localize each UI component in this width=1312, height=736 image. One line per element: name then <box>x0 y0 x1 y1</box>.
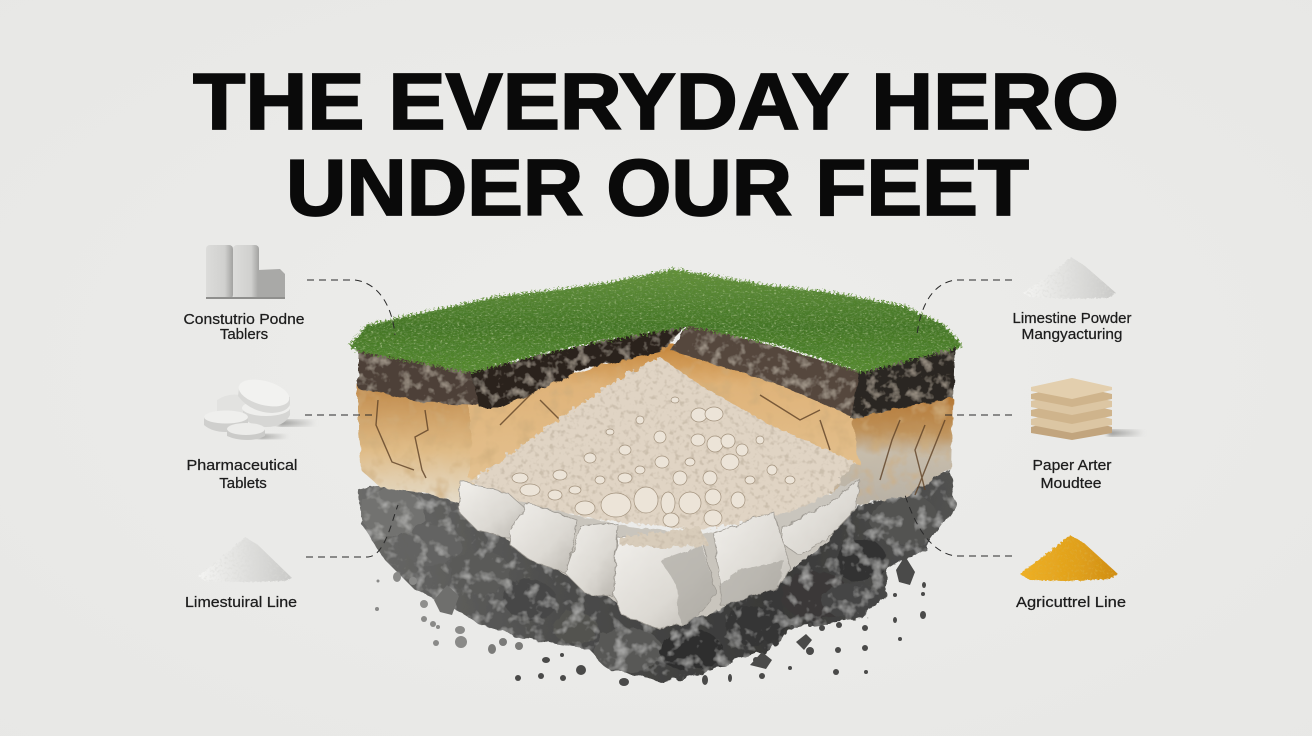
label: agricultural line: Agricuttrel Line <box>1016 594 1126 611</box>
icon: limestone powder pile left <box>198 537 292 582</box>
leader lines <box>305 280 1012 557</box>
label: paper: Moudtee <box>1040 475 1102 492</box>
soil cracks <box>376 395 945 495</box>
falling rock debris <box>375 556 926 686</box>
label: pharmaceutical: Pharmaceutical <box>186 457 298 474</box>
icon: agricultural lime pile <box>1020 535 1118 581</box>
layer: left ochre subsoil <box>358 385 480 503</box>
title: THE EVERYDAY HERO <box>193 57 1119 146</box>
label: limestuiral line: Limestuiral Line <box>185 594 297 611</box>
title: UNDER OUR FEET <box>286 143 1029 232</box>
large gravel stones <box>512 397 795 527</box>
layer: limestone gravel pile <box>470 357 855 530</box>
icon: limestone powder pile right <box>1023 257 1116 299</box>
layer: inner ochre wall <box>470 345 860 480</box>
icon: paper stack <box>1031 378 1144 440</box>
label: construction: Tablers <box>220 326 268 343</box>
icon: pharmaceutical tablets <box>204 375 316 440</box>
label: construction: Constutrio Podne <box>184 311 304 328</box>
label: pharmaceutical <box>186 457 298 492</box>
icon: construction blocks <box>206 245 285 299</box>
layer: dark bedrock <box>358 470 955 682</box>
label: limestone powder: Limestine Powder <box>1012 310 1132 327</box>
layer: dark topsoil <box>358 322 955 418</box>
label: limestone powder: Mangyacturing <box>1022 326 1122 343</box>
title <box>193 57 1119 232</box>
label: construction <box>184 311 304 343</box>
label: limestone powder <box>1012 310 1132 343</box>
label: paper: Paper Arter <box>1032 457 1112 474</box>
limestone boulders <box>460 478 860 630</box>
layer: right pale subsoil <box>825 392 953 505</box>
layer: grass top <box>350 270 962 372</box>
label: paper <box>1032 457 1112 492</box>
soil cross-section illustration <box>350 270 962 686</box>
label: pharmaceutical: Tablets <box>219 475 267 492</box>
fine gravel over boulders <box>620 527 708 548</box>
boulder shading <box>660 545 784 625</box>
